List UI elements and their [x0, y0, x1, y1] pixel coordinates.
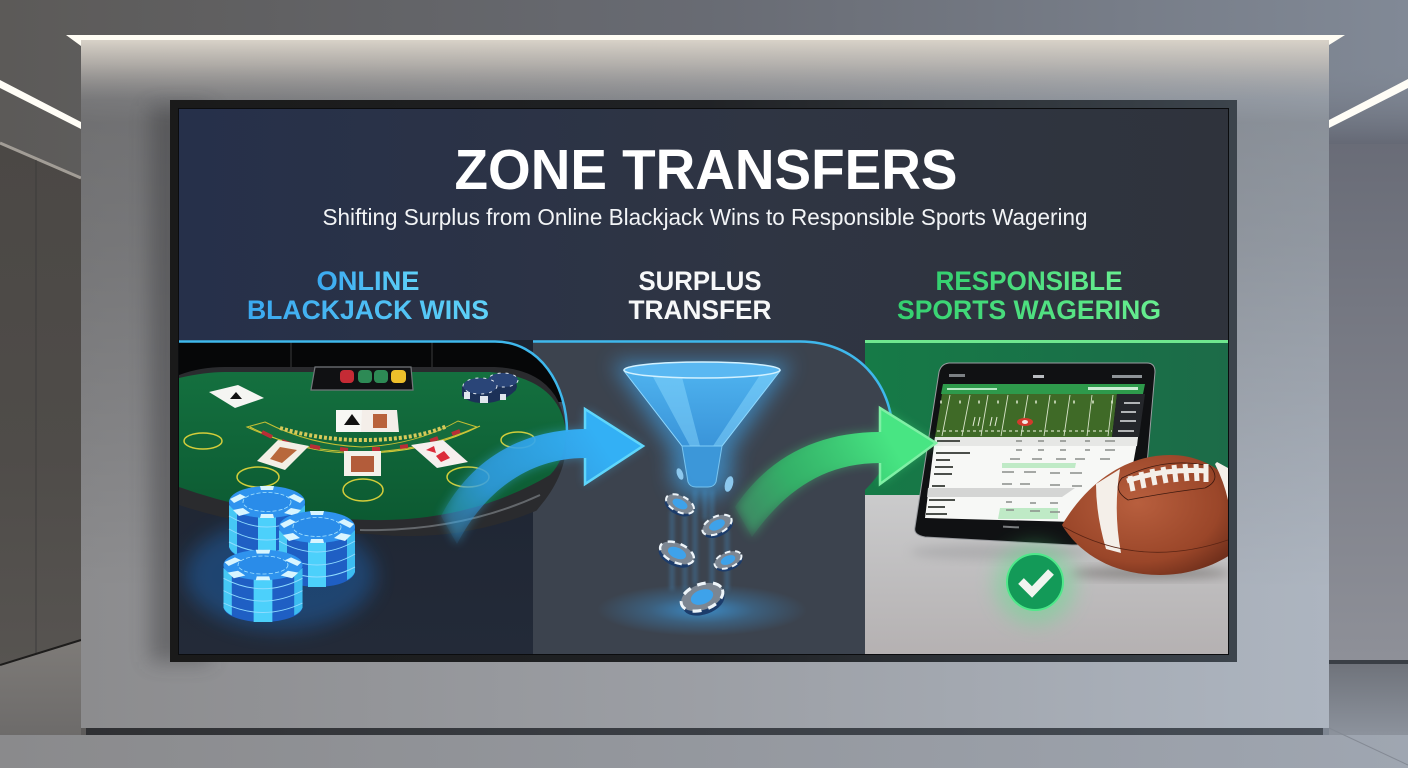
heading: responsible sports wagering: SPORTS WAGERING [897, 295, 1161, 325]
icon: funnel [612, 362, 792, 498]
heading: online blackjack wins [247, 266, 489, 325]
panel: surplus transfer [533, 340, 893, 654]
heading: responsible sports wagering: RESPONSIBLE [936, 266, 1122, 296]
tablet odds table [925, 437, 1138, 522]
heading: surplus transfer [628, 266, 772, 325]
heading: online blackjack wins: ONLINE [316, 266, 420, 296]
falling chips [597, 467, 807, 636]
betting circles [184, 432, 535, 501]
tablet [915, 363, 1155, 545]
dealer chip tray [311, 367, 413, 390]
tablet football field [935, 394, 1117, 437]
navy chip stack [462, 373, 518, 403]
arrow: transfer to sports wagering [735, 408, 936, 537]
blackjack table [179, 342, 579, 536]
american football [1062, 455, 1230, 579]
connector line: middle panel [533, 342, 893, 437]
playing cards [209, 385, 468, 476]
blue chip stacks [223, 486, 355, 622]
display frame [150, 100, 1237, 662]
heading: surplus transfer: TRANSFER [628, 295, 772, 325]
heading: responsible sports wagering [897, 266, 1161, 325]
tablet green bar [941, 384, 1145, 394]
panel: online blackjack wins [179, 340, 579, 654]
icon: green check badge [995, 544, 1075, 624]
connector line: left panel [179, 342, 567, 432]
subtitle: Shifting Surplus from Online Blackjack Wins to Responsible Sports Wagering [322, 204, 1088, 230]
heading: online blackjack wins: BLACKJACK WINS [247, 295, 489, 325]
betting arc [247, 421, 480, 453]
heading: surplus transfer: SURPLUS [638, 266, 762, 296]
title: ZONE TRANSFERS [454, 138, 958, 202]
arrow: blackjack to transfer [441, 409, 643, 544]
tablet sidebar [1112, 394, 1145, 437]
panel: responsible sports wagering [865, 340, 1230, 654]
tablet nav bar [949, 374, 1142, 378]
falling light streaks [672, 490, 727, 600]
